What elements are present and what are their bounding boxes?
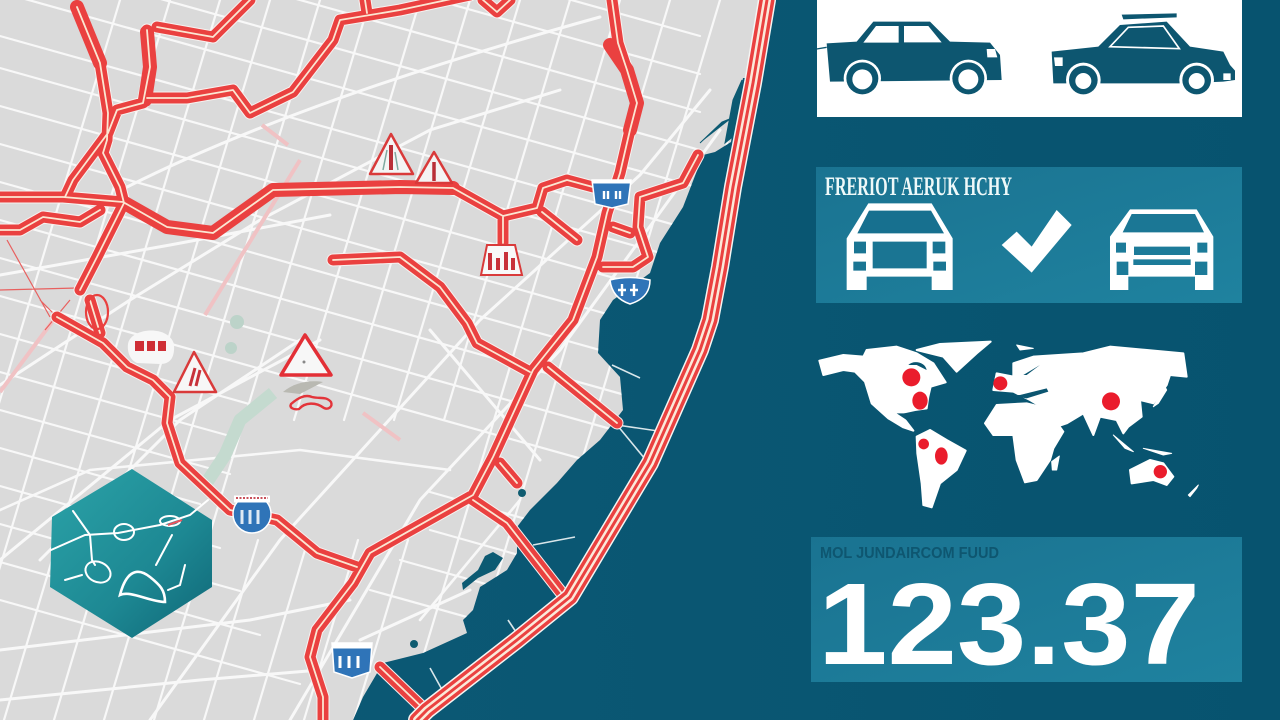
icon: blue route shield coast bbox=[610, 278, 650, 304]
icon: road sign centre bbox=[481, 245, 522, 275]
icon: pickup car side view bbox=[817, 22, 1002, 97]
map seas bbox=[897, 362, 1048, 420]
coastal highway bbox=[417, 0, 767, 720]
icon: warning triangle left bbox=[174, 352, 216, 392]
coastal ponds bbox=[410, 489, 526, 648]
inset highlight bbox=[168, 520, 182, 525]
icon: front car outline right bbox=[1110, 209, 1213, 290]
icon: small car outline bbox=[291, 396, 331, 409]
park spots bbox=[225, 315, 244, 354]
road halo bbox=[0, 0, 698, 720]
icon: warning triangle centre bbox=[281, 335, 331, 375]
lagoon bbox=[462, 552, 503, 590]
highway network bbox=[0, 0, 767, 720]
hexagon inset map bbox=[50, 469, 212, 638]
map hotspots bbox=[902, 368, 1167, 478]
icon: sedan car side view bbox=[1052, 13, 1235, 97]
thick road sections bbox=[77, 7, 637, 233]
icon: blue route badge bottom bbox=[332, 643, 372, 678]
sea details bbox=[430, 365, 665, 695]
panel: vehicle check bbox=[816, 167, 1242, 303]
small inlet bbox=[700, 80, 742, 143]
red road casing bbox=[0, 0, 698, 720]
park strip bbox=[207, 393, 273, 482]
icon: warning triangle top left bbox=[370, 134, 413, 174]
big number: 123.37 bbox=[818, 559, 1200, 689]
grey patch under sign bbox=[283, 381, 323, 394]
panel: key number bbox=[811, 537, 1242, 689]
icon: blue route badge left bbox=[233, 495, 271, 533]
red ramp loop bbox=[86, 295, 108, 329]
panel: white car comparison bbox=[817, 0, 1242, 117]
map continents bbox=[819, 342, 1198, 507]
panel heading: FRERIOT AERUK HCHY bbox=[825, 172, 1012, 201]
land area bbox=[0, 0, 771, 720]
thin red line marks bbox=[0, 240, 77, 330]
icon: check mark bbox=[1002, 210, 1072, 273]
panel: world map bbox=[819, 342, 1198, 507]
faint pink road marks bbox=[0, 125, 400, 440]
cream road centre lines bbox=[0, 0, 698, 720]
icon: front car outline left bbox=[847, 203, 953, 290]
icon: warning sign bubble bbox=[128, 330, 174, 364]
icon: warning triangle top right bbox=[416, 152, 452, 183]
number caption: MOL JUNDAIRCOM FUUD bbox=[820, 545, 999, 562]
inset route scribbles bbox=[51, 500, 208, 602]
icon: blue route shield top bbox=[592, 180, 631, 208]
street network bbox=[0, 0, 729, 720]
panel: city map bbox=[0, 0, 776, 720]
